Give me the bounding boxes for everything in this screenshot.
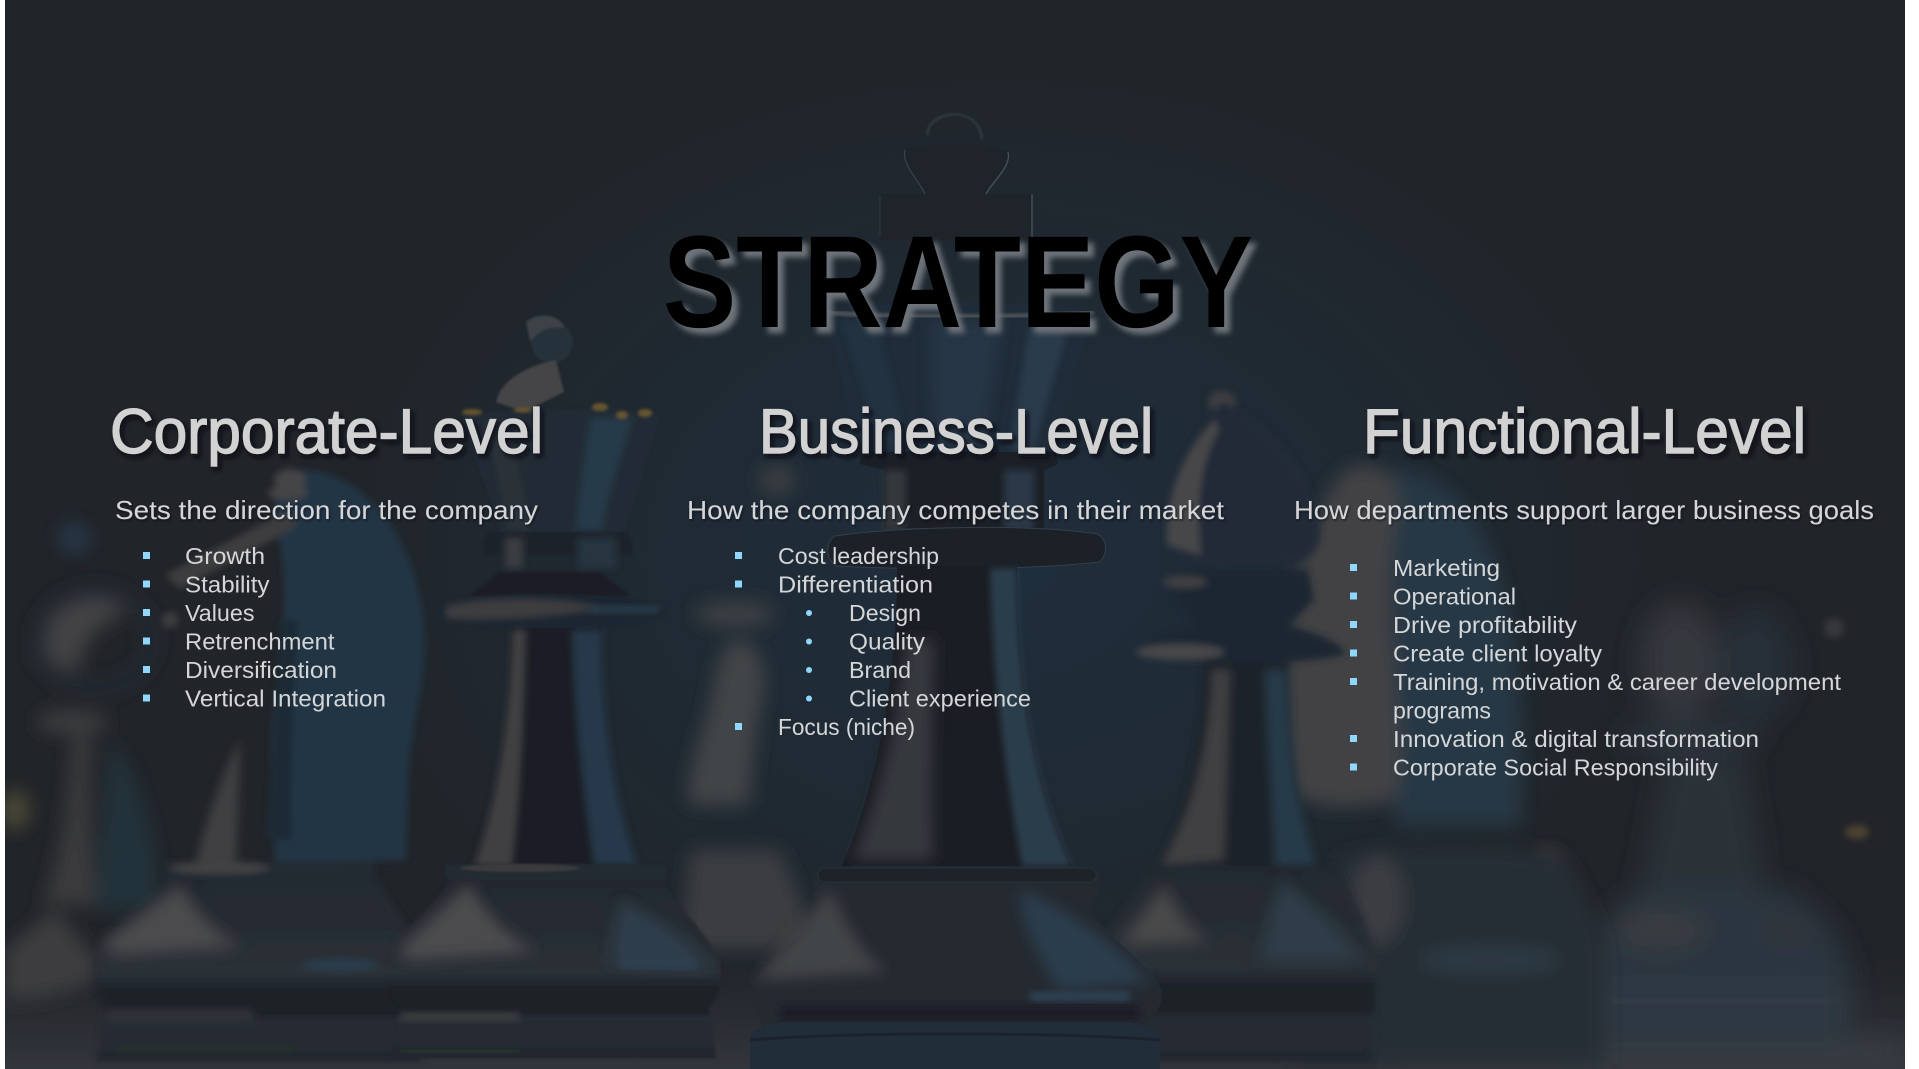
column: business-level [687,397,1225,740]
list: corporate-level: Stability [185,572,270,598]
column: corporate-level [110,397,543,712]
far left piece [1,523,162,1000]
king stem [842,566,1072,866]
list: corporate-level: Growth [185,543,265,569]
king cross [880,114,1032,240]
list: functional-level: Innovation & digital transformation [1393,726,1759,752]
king disc [828,527,1106,569]
list: business-level: Quality [849,628,925,654]
right bishop [1096,391,1376,1062]
list: corporate-level: Values [185,600,254,626]
king crown flare [824,302,1094,452]
subheading: business-level: How the company competes in their market [687,495,1225,525]
heading: business-level: Business-Level [759,397,1153,467]
list: functional-level: Drive profitability [1393,612,1577,638]
column: functional-level [1294,397,1874,780]
list: business-level: Client experience [849,686,1031,712]
left queen [388,315,721,1058]
list: business-level: Differentiation [778,572,933,598]
blurred knight, right [1283,465,1605,1065]
list: corporate-level: Vertical Integration [185,686,386,712]
central king [748,114,1162,1069]
heading: corporate-level: Corporate-Level [110,397,543,467]
list: functional-level [1350,555,1841,780]
king base [1104,928,1162,1012]
list: business-level [735,543,1031,740]
far right blurred pawns [1601,600,1890,1058]
list: functional-level: Corporate Social Responsibility [1393,754,1718,780]
list: corporate-level [143,543,386,712]
list: business-level: Focus (niche) [778,714,915,740]
title: STRATEGY [663,208,1253,355]
knight, left [92,469,425,1062]
list: business-level: Brand [849,657,911,683]
list: functional-level: Create client loyalty [1393,640,1602,666]
list: functional-level: Operational [1393,584,1516,610]
list: corporate-level: Retrenchment [185,628,335,654]
list: corporate-level: Diversification [185,657,337,683]
subheading: functional-level: How departments support larger business goals [1294,495,1874,525]
list: functional-level: Training, motivation & career development [1393,669,1841,695]
subheading: corporate-level: Sets the direction for the company [115,495,538,525]
list: functional-level: programs [1393,698,1491,724]
list: business-level: Cost leadership [778,543,939,569]
list: functional-level: Marketing [1393,555,1500,581]
piece behind center-left [680,464,810,950]
king collar [860,452,1058,528]
heading: functional-level: Functional-Level [1363,397,1806,467]
list: business-level: Design [849,600,921,626]
